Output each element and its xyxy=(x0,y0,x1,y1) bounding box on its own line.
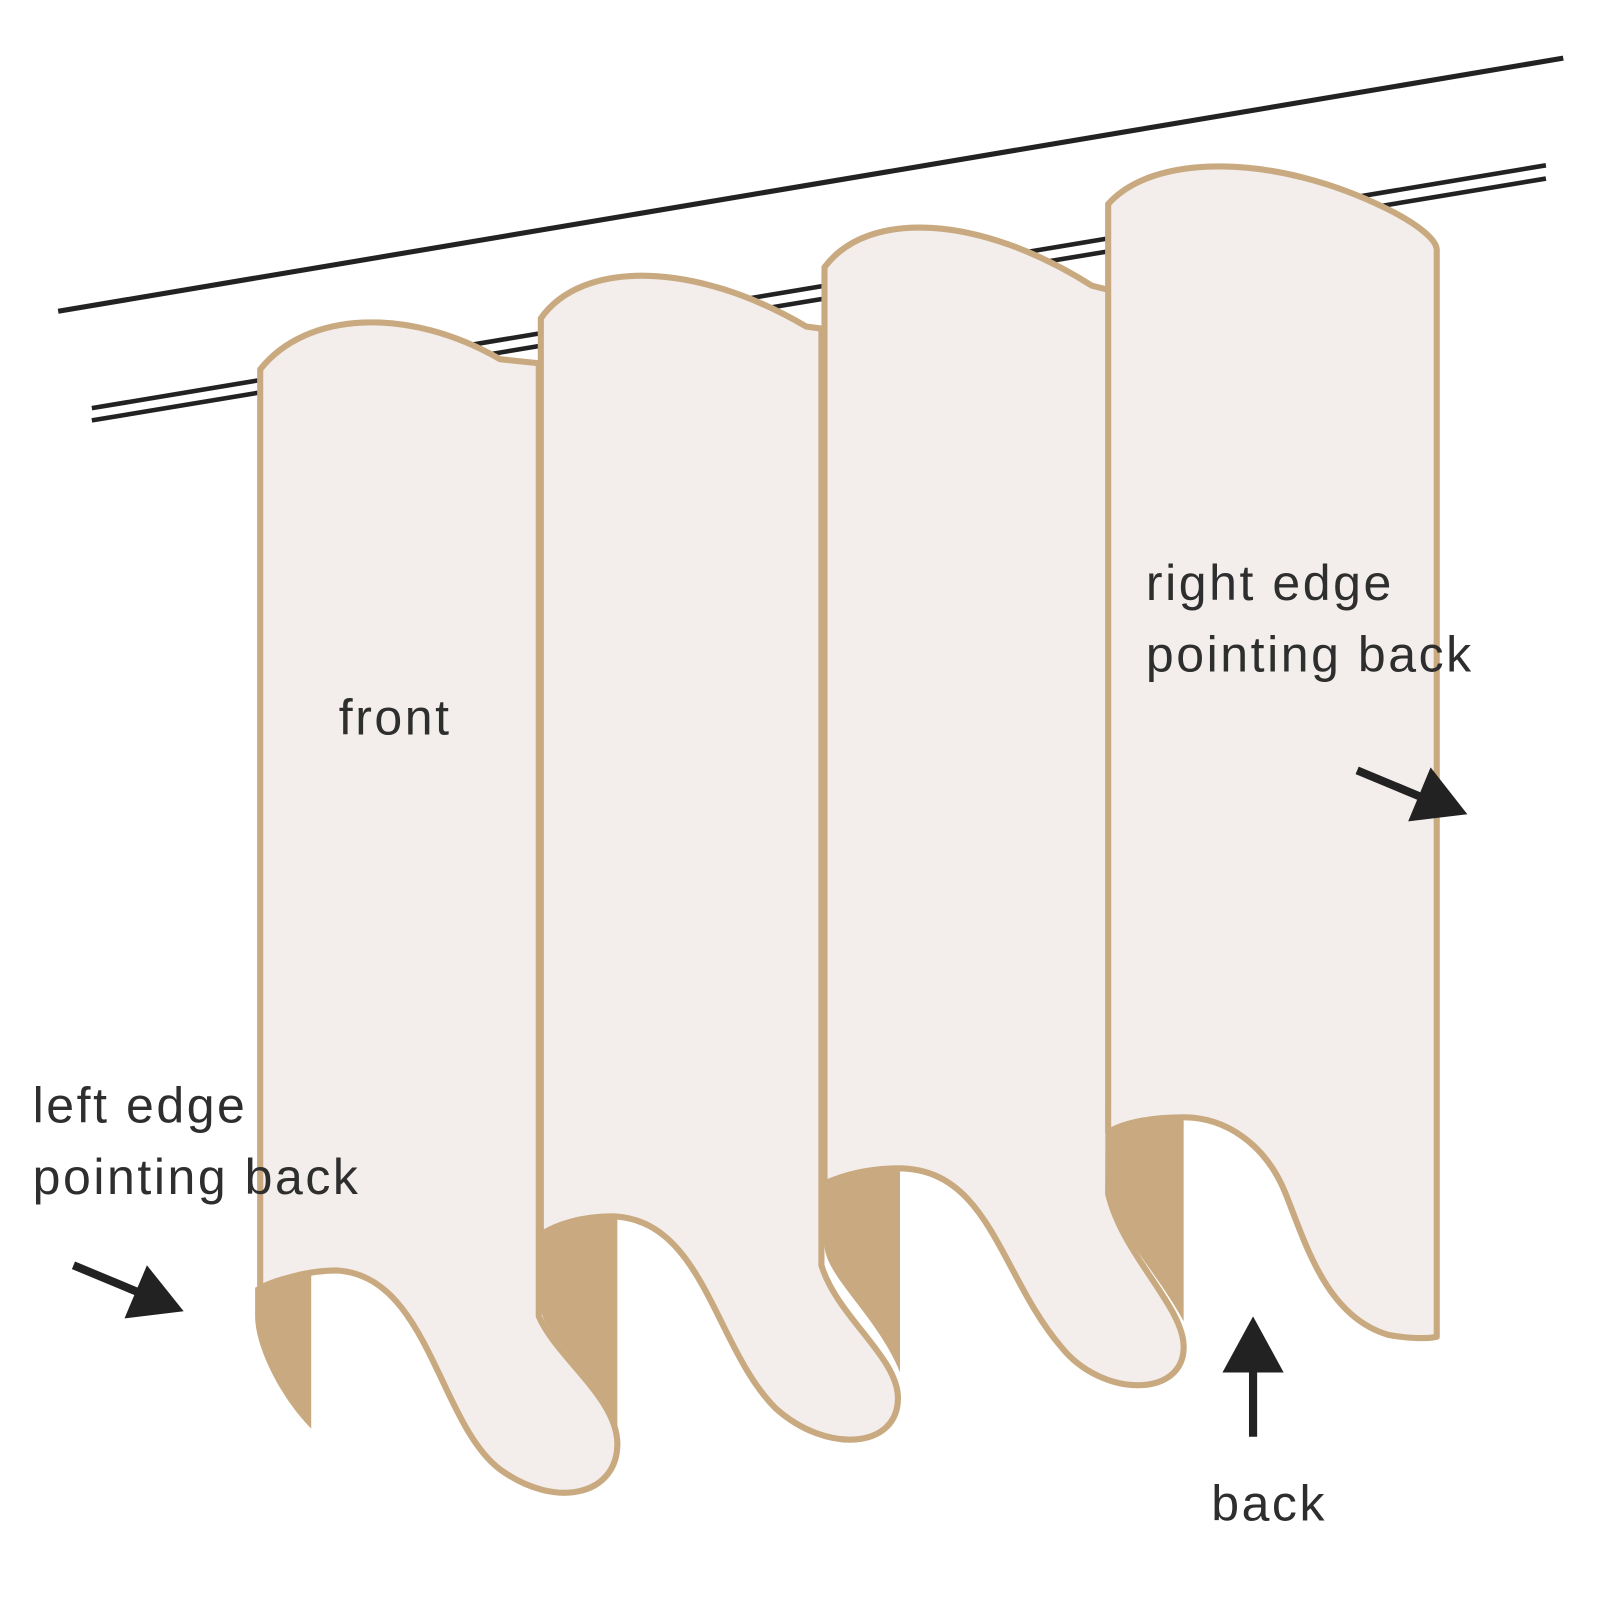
arrow: right edge xyxy=(1357,767,1467,821)
curtain track xyxy=(92,165,1546,420)
label: back: back xyxy=(1211,1475,1327,1531)
label: front: front xyxy=(339,690,452,746)
ceiling line xyxy=(58,58,1563,311)
label: left edge: left edge xyxy=(33,1077,247,1133)
folds (back side) xyxy=(255,1119,1184,1429)
label: right edge: right edge xyxy=(1146,555,1394,611)
label: left edge: pointing back xyxy=(33,1149,360,1205)
curtain panels xyxy=(260,166,1437,1493)
arrow: left edge xyxy=(73,1265,184,1318)
label: right edge: pointing back xyxy=(1146,626,1474,682)
arrow: back xyxy=(1222,1316,1284,1437)
